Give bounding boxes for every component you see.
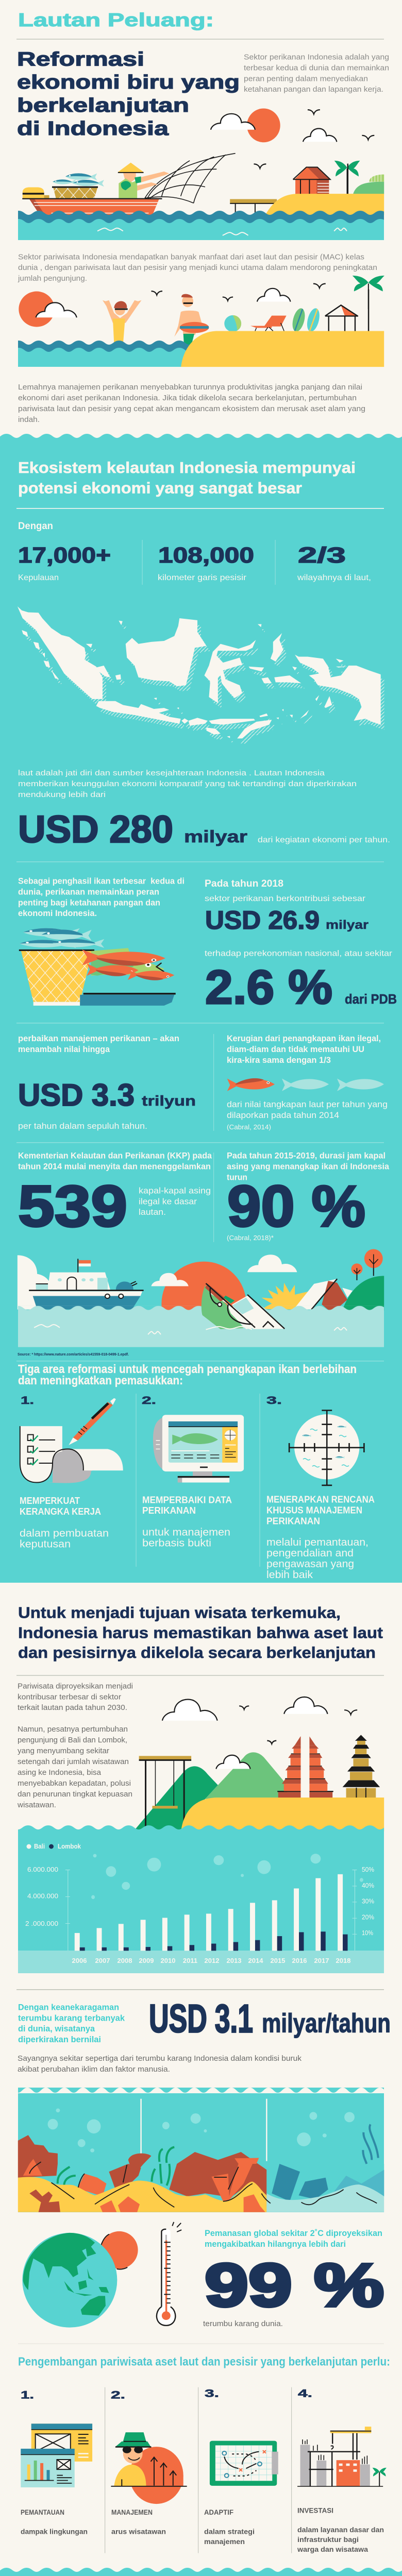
- stat: 99 percent: terumbu karang dunia.: [203, 2319, 283, 2328]
- text: second-largest producer: Sebagai penghasil ikan terbesar kedua di: [18, 877, 185, 886]
- heading: tourism: [18, 1603, 383, 1662]
- chart axis labels: 4.000.000: [27, 1892, 58, 1900]
- main heading: Reformasi: [17, 48, 144, 70]
- need 2: visitor management: MANAJEMEN: [111, 2508, 153, 2516]
- stat: 539 foreign vessels: Kementerian Kelautan dan Perikanan (KKP) pada: [18, 1151, 212, 1160]
- bar chart: visitors: [65, 1854, 363, 1951]
- stat: USD 3.3 trillion: [18, 1034, 196, 1131]
- need 3: adaptive strategy: [204, 2388, 278, 2546]
- panel: teal plastics section: [0, 2568, 402, 2576]
- chart axis labels: 2014: [248, 1957, 263, 1964]
- text: second-largest producer: ekonomi Indonesia.: [18, 909, 97, 918]
- stats row: [18, 540, 371, 585]
- need 4: investment: infrastruktur bagi: [297, 2535, 359, 2544]
- need 1: monitoring: dampak lingkungan: [21, 2528, 88, 2536]
- need 4: investment: [297, 2388, 387, 2553]
- reform 3: management plans: PERIKANAN: [266, 1516, 320, 1526]
- need 2: visitor management: arus wisatawan: [111, 2528, 166, 2536]
- reform 1: strengthen framework: MEMPERKUAT: [20, 1496, 80, 1506]
- chart axis labels: 50%: [362, 1866, 374, 1873]
- stat: 2018 fisheries contribution: 2.6 %: [205, 960, 332, 1014]
- illustration: healthy and bleached corals: [18, 2099, 384, 2212]
- stat: 2018 fisheries contribution: USD 26.9: [205, 906, 320, 935]
- stat: coral reef value: di dunia, wisatanya: [18, 2024, 95, 2033]
- stat: USD 280 milyar: USD 280: [18, 808, 173, 851]
- stat: illegal fishing losses: diam-diam dan tidak mematuhi UU: [227, 1045, 364, 1054]
- stats row: 2/3: [298, 543, 346, 568]
- reform 3: management plans: KHUSUS MANAJEMEN: [266, 1505, 362, 1516]
- chart axis labels: 2010: [161, 1957, 175, 1964]
- heading: marine ecosystem: [18, 459, 356, 497]
- heading: marine ecosystem: potensi ekonomi yang sangat besar: [18, 479, 302, 497]
- stats row: 108,000: [158, 543, 254, 568]
- intro text: fisheries: terbesar kedua di dunia dan memainkan: [244, 64, 389, 73]
- stat: 2018 fisheries contribution: [205, 878, 397, 1014]
- illustration: beach tourism scene: [19, 276, 384, 347]
- legend: [27, 1842, 81, 1850]
- stat: 90 percent decline: turun: [227, 1173, 247, 1182]
- reform 2: improve data: 2.: [142, 1395, 156, 1406]
- text: tourism projection: setengah dari jumlah wisatawan: [18, 1757, 129, 1766]
- map of Indonesia: [18, 606, 384, 743]
- reform 3: management plans: melalui pemantauan,: [266, 1537, 368, 1548]
- need 3: adaptive strategy: dalam strategi: [204, 2528, 255, 2536]
- heading: three reform areas: Tiga area reformasi untuk mencegah penangkapan ikan berlebihan: [18, 1362, 357, 1376]
- chart axis labels: 2012: [205, 1957, 219, 1964]
- intro text: tourism: Sektor pariwisata Indonesia mendapatkan banyak manfaat dari aset laut dan pesisir (MAC) kelas: [18, 253, 364, 262]
- stat: coral reef value: [18, 1996, 391, 2074]
- stat: USD 3.3 trillion: menambah nilai hingga: [18, 1045, 110, 1054]
- text: tourism projection: menyebabkan kepadatan, polusi: [18, 1779, 131, 1788]
- illustration: patrol ship and sinking vessels: [18, 1249, 384, 1346]
- stat: illegal fishing losses: dari nilai tangkapan laut per tahun yang: [227, 1099, 388, 1109]
- stat: 539 foreign vessels: lautan.: [139, 1207, 166, 1217]
- intro text: fisheries: ketahanan pangan dan lapangan kerja.: [244, 85, 383, 94]
- stat: 99 percent: [203, 2228, 384, 2328]
- reform 3: management plans: pengawasan yang: [266, 1558, 354, 1570]
- illustration: fish basket and tray: [19, 928, 176, 1006]
- chart axis labels: 2007: [95, 1957, 110, 1964]
- heading: tourism: Untuk menjadi tujuan wisata terkemuka,: [18, 1603, 341, 1622]
- chart axis labels: 40%: [362, 1882, 374, 1889]
- reform 3: management plans: pengendalian and: [266, 1548, 354, 1559]
- reform 2: improve data: MEMPERBAIKI DATA: [142, 1495, 232, 1505]
- stat: illegal fishing losses: (Cabral, 2014): [227, 1123, 271, 1131]
- stat: coral reef value: Sayangnya sekitar sepertiga dari terumbu karang Indonesia dalam kondisi buruk: [18, 2054, 302, 2063]
- label: dengan: Dengan: [18, 521, 53, 532]
- ripples: [97, 228, 347, 235]
- intro text: fisheries: Sektor perikanan Indonesia adalah yang: [244, 53, 389, 62]
- intro text: risks: [18, 383, 365, 424]
- stat: coral reef value: terumbu karang terbanyak: [18, 2013, 125, 2023]
- stats row: kilometer garis pesisir: [158, 573, 247, 582]
- intro text: fisheries: peran penting dalam menyediakan: [244, 74, 368, 83]
- stat: coral reef value: Dengan keanekaragaman: [18, 2003, 119, 2012]
- intro text: tourism: dunia , dengan pariwisata laut dan pesisir yang menjadi kunci utama dalam mendorong peningkatan: [18, 263, 377, 272]
- legend: Lombok: [58, 1842, 81, 1850]
- need 1: monitoring: [21, 2389, 92, 2536]
- reform 2: improve data: [142, 1395, 244, 1549]
- intro text: fisheries: [244, 53, 389, 94]
- chart axis labels: 2009: [139, 1957, 154, 1964]
- text: sea is identity: [18, 769, 357, 799]
- text: sea is identity: laut adalah jati diri dan sumber kesejahteraan Indonesia . Lautan Indonesia: [18, 769, 325, 777]
- intro text: tourism: [18, 253, 377, 283]
- reform 1: strengthen framework: KERANGKA KERJA: [20, 1506, 101, 1517]
- stat: coral reef value: diperkirakan bernilai: [18, 2035, 101, 2044]
- sand: beach scene: [181, 331, 384, 367]
- stat: 2018 fisheries contribution: milyar: [326, 918, 368, 932]
- need 3: adaptive strategy: manajemen: [204, 2537, 245, 2546]
- stat: USD 280 milyar: [18, 808, 390, 851]
- heading: tourism: Indonesia harus memastikan bahwa aset laut: [18, 1624, 383, 1641]
- need 4: investment: INVESTASI: [297, 2506, 333, 2515]
- stat: 539 foreign vessels: [18, 1151, 212, 1239]
- stat: 539 foreign vessels: kapal-kapal asing: [139, 1186, 211, 1196]
- main heading: di Indonesia: [17, 118, 169, 140]
- stat: 2018 fisheries contribution: dari PDB: [345, 991, 397, 1007]
- text: tourism projection: pengunjung di Bali dan Lombok,: [18, 1736, 127, 1744]
- chart axis labels: 2011: [183, 1957, 197, 1964]
- reform 2: improve data: berbasis bukti: [142, 1537, 211, 1549]
- need 4: investment: warga dan wisatawa: [297, 2545, 368, 2553]
- stat: USD 3.3 trillion: perbaikan manajemen perikanan – akan: [18, 1034, 179, 1043]
- stat: USD 280 milyar: milyar: [184, 827, 247, 846]
- illustration: thermometer: [157, 2222, 181, 2326]
- stat: 2018 fisheries contribution: Pada tahun 2018: [205, 878, 283, 889]
- intro text: risks: indah.: [18, 415, 40, 424]
- text: tourism projection: yang menyumbang sekitar: [18, 1747, 109, 1755]
- intro text: risks: ekonomi dari aset perikanan Indonesia. Jika tidak dikelola secara berkelanjutan, pertumbuhan: [18, 394, 357, 402]
- need 3: adaptive strategy: 3.: [205, 2388, 219, 2400]
- need 2: visitor management: 2.: [111, 2389, 125, 2401]
- text: sea is identity: memberikan keunggulan ekonomi komparatif yang tak tertandingi dan diperkirakan: [18, 779, 357, 788]
- stats row: wilayahnya di laut,: [297, 573, 371, 582]
- water: sinking ship scene: [18, 1306, 384, 1347]
- intro text: risks: pariwisata laut dan pesisir yang cepat akan mengancam ekosistem dan merusak aset alam yang: [18, 404, 365, 413]
- chart axis labels: 2017: [314, 1957, 329, 1964]
- stat: illegal fishing losses: dilaporkan pada tahun 2014: [227, 1110, 339, 1120]
- intro text: tourism: jumlah pengunjung.: [18, 274, 87, 283]
- illustration: Bali temple landscape: [133, 1697, 384, 1832]
- stat: illegal fishing losses: Kerugian dari penangkapan ikan ilegal,: [227, 1034, 381, 1043]
- stat: USD 3.3 trillion: USD 3.3: [18, 1078, 135, 1112]
- text: tourism projection: asing ke Indonesia, bisa: [18, 1768, 102, 1777]
- heading: three reform areas: [18, 1362, 357, 1387]
- reform 1: strengthen framework: [20, 1395, 123, 1550]
- chart axis labels: 10%: [362, 1929, 373, 1937]
- panel: tourist arrivals chart: [18, 1825, 384, 1973]
- illustration: globe and sun: [22, 2231, 138, 2328]
- chart axis labels: 2 .000.000: [25, 1920, 58, 1927]
- need 1: monitoring: 1.: [21, 2389, 34, 2401]
- icon: crosshair over sea: [289, 1410, 364, 1485]
- text: second-largest producer: dunia, perikanan memainkan peran: [18, 887, 159, 896]
- stat: 539 foreign vessels: 539: [18, 1174, 127, 1239]
- text: second-largest producer: [18, 877, 185, 918]
- stat: coral reef value: USD 3.1: [149, 1996, 253, 2041]
- icon: construction and buildings: [297, 2427, 387, 2487]
- stat: 2018 fisheries contribution: sektor perikanan berkontribusi sebesar: [205, 894, 366, 903]
- reform 1: strengthen framework: dalam pembuatan: [20, 1528, 109, 1539]
- stat: USD 3.3 trillion: per tahun dalam sepuluh tahun.: [18, 1121, 147, 1131]
- reform 3: management plans: [266, 1395, 375, 1581]
- panel: teal fisheries section: [0, 434, 402, 1583]
- reform 1: strengthen framework: keputusan: [20, 1538, 71, 1550]
- stat: illegal fishing losses: kira-kira sama dengan 1/3: [227, 1056, 331, 1065]
- reform 3: management plans: lebih baik: [266, 1569, 313, 1581]
- chart axis labels: 2015: [271, 1957, 285, 1964]
- text: second-largest producer: penting bagi ketahanan pangan dan: [18, 899, 160, 908]
- chart axis labels: 2016: [292, 1957, 307, 1964]
- icon: one in three fish: [227, 1078, 384, 1091]
- need 4: investment: 4.: [298, 2388, 312, 2400]
- water foreground: boat scene: [18, 219, 384, 240]
- chart axis labels: 20%: [362, 1913, 374, 1921]
- stat: 539 foreign vessels: tahun 2014 mulai menyita dan menenggelamkan: [18, 1162, 211, 1172]
- stat: 99 percent: 99 %: [205, 2251, 384, 2319]
- heading: three reform areas: dan meningkatkan pemasukkan:: [18, 1374, 183, 1387]
- chart axis labels: 6.000.000: [27, 1866, 58, 1873]
- heading: marine ecosystem: Ekosistem kelautan Indonesia mempunyai: [18, 459, 356, 477]
- text: tourism projection: Namun, pesatnya pertumbuhan: [18, 1725, 128, 1734]
- column dividers: reforms: [136, 1394, 260, 1567]
- need 4: investment: dalam layanan dasar dan: [297, 2526, 384, 2534]
- chart axis labels: 2013: [227, 1957, 241, 1964]
- illustration: sinking ship foreground: [34, 1283, 347, 1334]
- icon: monitoring windows: [21, 2424, 92, 2487]
- stat: 2018 fisheries contribution: terhadap perekonomian nasional, atau sekitar: [205, 949, 393, 958]
- stats row: 17,000+: [18, 543, 111, 568]
- need 3: adaptive strategy: ADAPTIF: [204, 2508, 233, 2516]
- stats row: Kepulauan: [18, 573, 59, 582]
- stat: illegal fishing losses: [227, 1034, 388, 1131]
- reform 2: improve data: untuk manajemen: [142, 1527, 230, 1538]
- chart axis labels: 30%: [362, 1897, 374, 1905]
- text: sea is identity: mendukung lebih dari: [18, 790, 106, 799]
- stat: 99 percent: mengakibatkan hilangnya lebih dari: [205, 2239, 346, 2249]
- chart axis labels: 2018: [336, 1957, 350, 1964]
- water front: beach scene: [18, 348, 193, 367]
- chart axis labels: 2006: [72, 1957, 87, 1964]
- intro text: risks: Lemahnya manajemen perikanan menyebabkan turunnya produktivitas jangka panjang dan nilai: [18, 383, 362, 392]
- icon: tourist and rising arrows: [111, 2432, 187, 2504]
- reform 3: management plans: MENERAPKAN RENCANA: [266, 1495, 375, 1505]
- water back: beach scene: [18, 341, 193, 356]
- stat: 90 percent decline: [227, 1151, 390, 1242]
- text: tourism projection: terkait lautan pada tahun 2030.: [18, 1703, 127, 1712]
- title: Lautan Peluang:: [18, 9, 214, 30]
- source note: Source: * https://www.nature.com/articles/s41559-018-0499-1.epdf.: [18, 1352, 129, 1357]
- need 1: monitoring: PEMANTAUAN: [21, 2508, 64, 2516]
- legend: Bali: [34, 1842, 45, 1850]
- stat: 90 percent decline: (Cabral, 2018)*: [227, 1234, 274, 1242]
- water: boat scene: [18, 211, 384, 226]
- heading: tourism: dan pesisirnya dikelola secara berkelanjutan: [18, 1643, 376, 1662]
- need 2: visitor management: [111, 2389, 187, 2536]
- stat: USD 3.3 trillion: trilyun: [142, 1093, 196, 1109]
- text: tourism projection: [17, 1682, 133, 1809]
- main heading: ekonomi biru yang: [17, 72, 240, 93]
- stat: coral reef value: akibat perubahan iklim dan faktor manusia.: [18, 2065, 170, 2074]
- text: tourism projection: dan penurunan tingkat kepuasan: [18, 1790, 132, 1799]
- stat: 99 percent: Pemanasan global sekitar 2˚C diproyeksikan: [205, 2228, 382, 2238]
- panel: coral reef: [18, 2088, 384, 2212]
- chart axis labels: 2008: [118, 1957, 132, 1964]
- illustration: fisherman on boat: [22, 108, 384, 215]
- stat: 539 foreign vessels: ilegal ke dasar: [139, 1196, 197, 1207]
- text: tourism projection: kontribusar terbesar di sektor: [18, 1692, 121, 1701]
- icon: strategy board: [210, 2441, 278, 2486]
- stat: 90 percent decline: 90 %: [227, 1174, 365, 1239]
- main heading: [17, 48, 240, 140]
- stat: 90 percent decline: Pada tahun 2015-2019, durasi jam kapal: [227, 1151, 386, 1160]
- text: tourism projection: wisatawan.: [17, 1801, 56, 1809]
- main heading: berkelanjutan: [17, 95, 189, 116]
- icon: monitor with fish: [153, 1415, 244, 1483]
- reform 3: management plans: 3.: [266, 1395, 282, 1406]
- text: tourism projection: Pariwisata diproyeksikan menjadi: [18, 1682, 133, 1690]
- chart axis labels: [25, 1866, 374, 1964]
- stat: 90 percent decline: asing yang menangkap ikan di Indonesia: [227, 1162, 390, 1172]
- icon: checklist and pen: [20, 1398, 123, 1483]
- stat: USD 280 milyar: dari kegiatan ekonomi per tahun.: [258, 836, 390, 844]
- reform 2: improve data: PERIKANAN: [142, 1505, 196, 1516]
- column dividers: tourism needs: [105, 2387, 292, 2553]
- reform 1: strengthen framework: 1.: [21, 1395, 34, 1406]
